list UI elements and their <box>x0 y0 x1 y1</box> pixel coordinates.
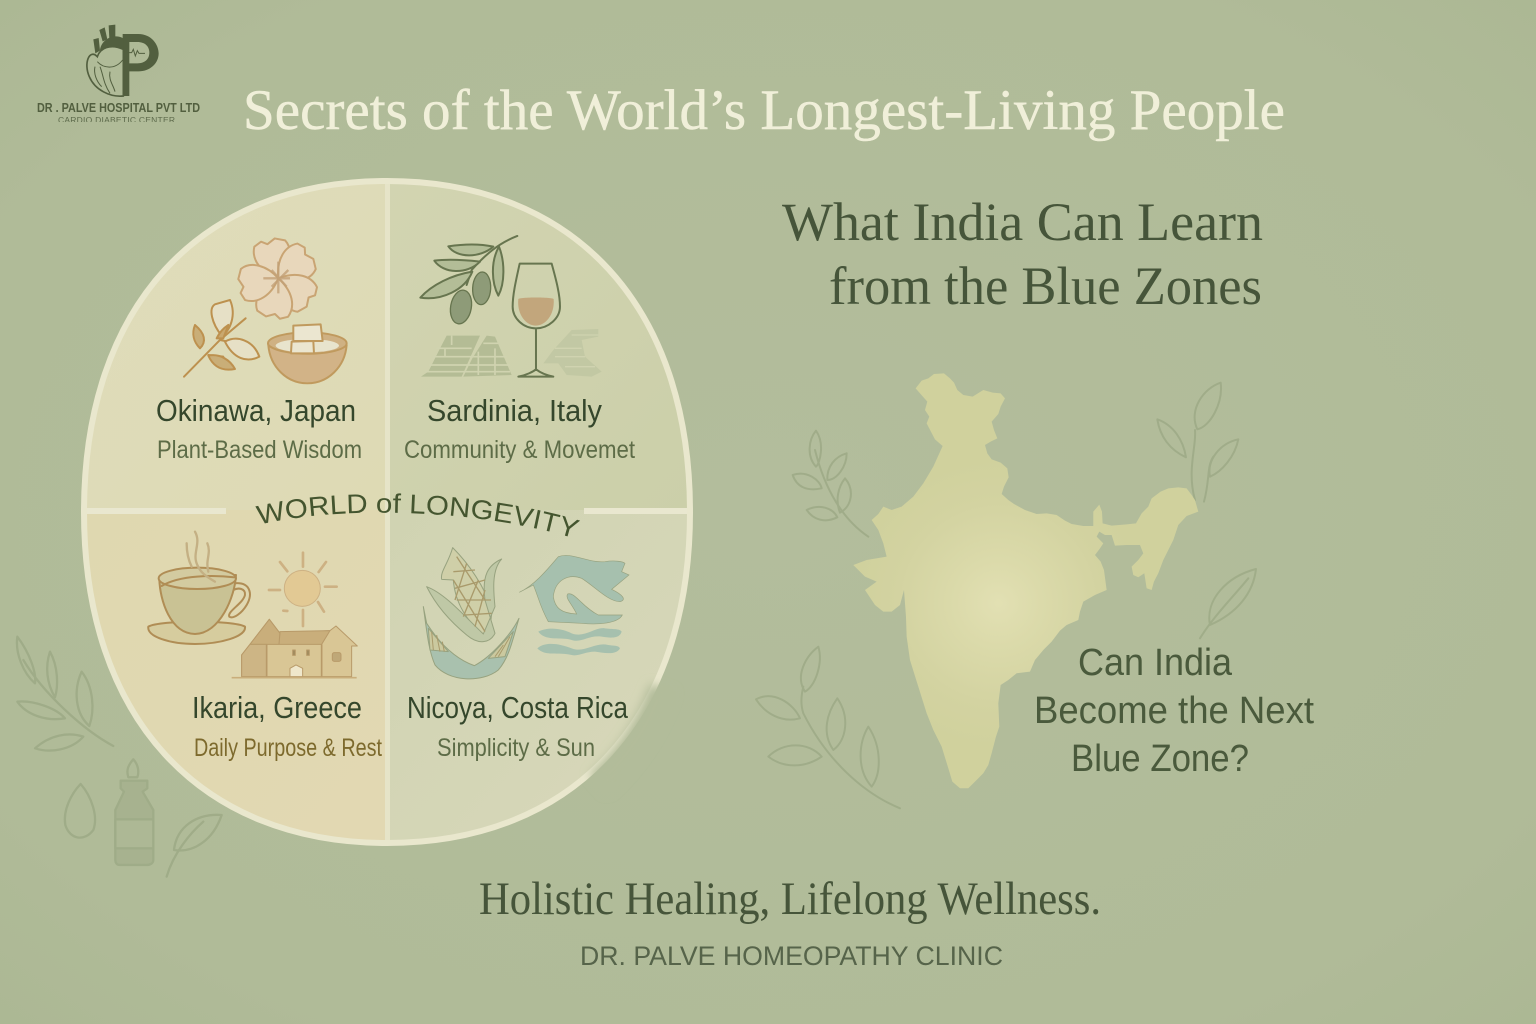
callout line 3: Blue Zone? <box>1071 738 1249 780</box>
subheading: Daily Purpose & Rest: Daily Purpose & Rest <box>194 734 382 762</box>
subtitle: What India Can Learn <box>782 192 1263 316</box>
callout line 2: Become the Next <box>1034 690 1314 732</box>
quadrant: Sardinia <box>404 236 635 464</box>
logo tagline: CARDIO DIABETIC CENTER <box>58 115 175 125</box>
logo name: DR . PALVE HOSPITAL PVT LTD <box>37 101 200 115</box>
heading: Ikaria, Greece: Ikaria, Greece <box>192 690 362 725</box>
clinic name: DR. PALVE HOMEOPATHY CLINIC <box>580 941 1003 971</box>
footer <box>479 873 1101 971</box>
decorative herbs: right of India <box>1157 383 1256 638</box>
decorative herbs: bottom left <box>17 637 222 877</box>
subtitle line 2: from the Blue Zones <box>829 256 1262 316</box>
icon: heart and P monogram <box>87 25 159 96</box>
callout line 1: Can India <box>1078 642 1233 684</box>
quadrant: Okinawa <box>156 237 362 464</box>
decorative herbs: left of India <box>756 431 900 808</box>
map: India <box>853 373 1198 788</box>
circle ring <box>84 181 690 843</box>
heading: Nicoya, Costa Rica: Nicoya, Costa Rica <box>407 690 629 725</box>
icon: olive branch, wine glass and stones <box>420 236 602 377</box>
subheading: Community & Movemet: Community & Movemet <box>404 436 635 464</box>
panel: World of Longevity circle <box>81 178 693 846</box>
faded ring edge <box>598 688 662 784</box>
curved label: World of Longevity: WORLD of LONGEVITY <box>255 493 580 536</box>
tagline: Holistic Healing, Lifelong Wellness. <box>479 873 1101 925</box>
logo: Dr. Palve Hospital <box>37 25 200 125</box>
subheading: Plant-Based Wisdom: Plant-Based Wisdom <box>157 436 362 464</box>
subheading: Simplicity & Sun: Simplicity & Sun <box>437 734 595 762</box>
icon: corn, hammock and wave <box>423 548 629 679</box>
quadrant backgrounds <box>83 180 691 850</box>
title: Secrets of the World’s Longest-Living People <box>243 79 1285 142</box>
icon: tea cup, sun and house <box>148 532 357 678</box>
quadrant: Nicoya <box>407 548 629 762</box>
heading: Sardinia, Italy: Sardinia, Italy <box>427 393 602 428</box>
icon: blossom, branch and tofu bowl <box>184 237 347 383</box>
heading: Okinawa, Japan: Okinawa, Japan <box>156 393 356 428</box>
quadrant: Ikaria <box>148 532 382 762</box>
callout: Can India Become the Next Blue Zone? <box>1034 642 1314 780</box>
subtitle line 1: What India Can Learn <box>782 192 1263 252</box>
